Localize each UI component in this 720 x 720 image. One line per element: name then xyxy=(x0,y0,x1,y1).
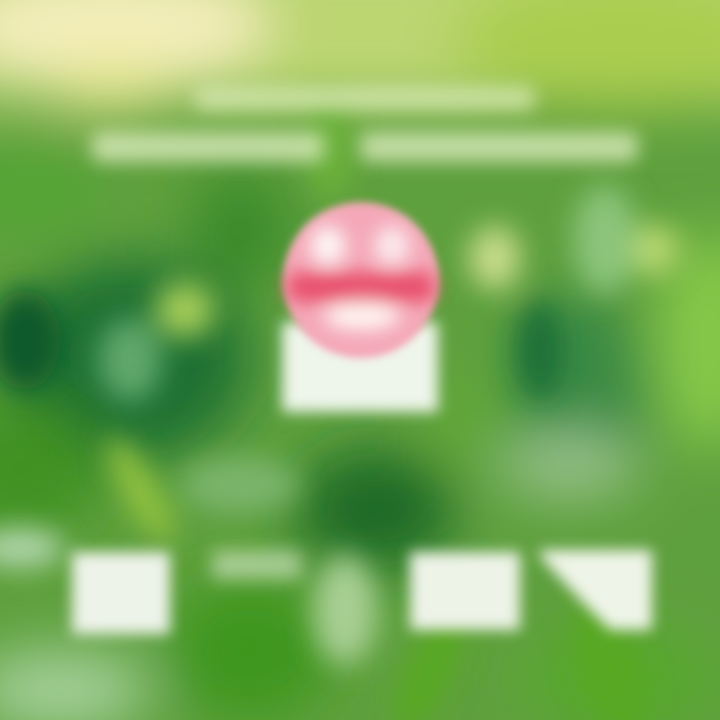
icon: pink smiling face xyxy=(283,202,439,358)
panel: stat card 2 xyxy=(212,550,302,580)
panel: stat card 4 xyxy=(540,550,652,630)
panel: stat card 3 xyxy=(410,552,520,630)
heading: blurred title lines xyxy=(92,86,638,162)
panel: stat card 1 xyxy=(72,552,170,634)
panel: central white card xyxy=(282,322,438,412)
